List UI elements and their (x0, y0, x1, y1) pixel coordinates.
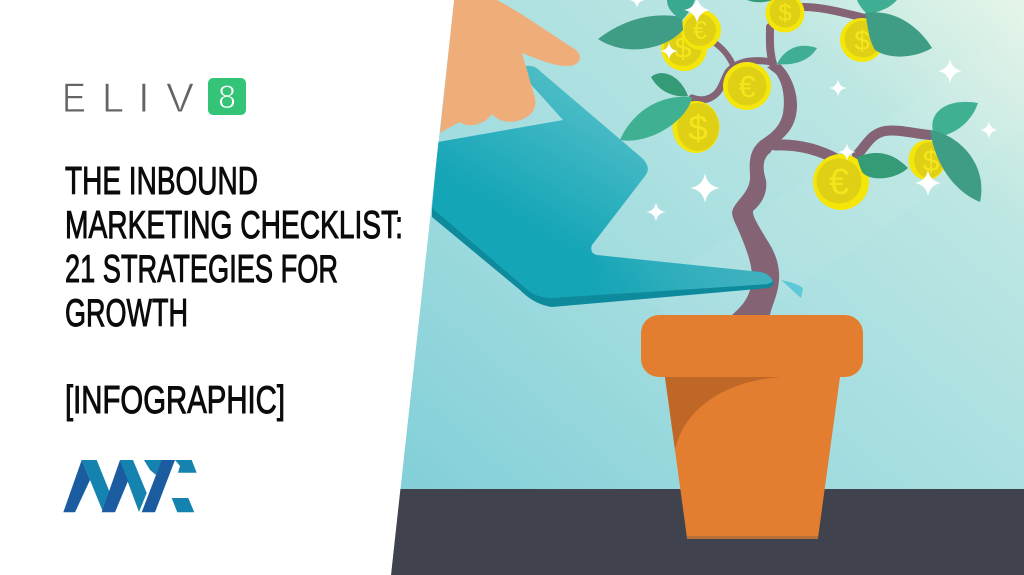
spout highlight (585, 255, 772, 296)
coins (661, 0, 946, 210)
watering can (432, 66, 774, 307)
logo: ELIV8 (62, 74, 246, 121)
coin: lower euro (813, 154, 869, 210)
coin: lower euro: € (829, 161, 849, 202)
logo wordmark: E (62, 74, 86, 121)
coin: top dollar: $ (778, 0, 792, 27)
logo wordmark: V (166, 74, 194, 121)
logo badge (208, 78, 246, 115)
logo wordmark (62, 74, 194, 121)
logo wordmark: I (138, 74, 150, 121)
water drop (781, 280, 803, 298)
table (391, 489, 1024, 575)
coin: right dollar: $ (923, 145, 940, 178)
coin: top left euro: € (693, 17, 707, 45)
hand (440, 0, 580, 133)
pot bottom edge (687, 536, 818, 539)
flower pot (641, 315, 863, 539)
light ray (640, 20, 1024, 340)
white title panel (0, 0, 454, 575)
title: THE INBOUND (65, 160, 258, 203)
coin: top right dollar (840, 18, 884, 62)
sparkles (629, 0, 998, 222)
coin: central euro (723, 62, 771, 110)
branches (692, 7, 930, 160)
pot body (665, 377, 840, 538)
tree (692, 7, 930, 315)
pot rim (641, 315, 863, 377)
can underside (432, 206, 774, 307)
title: 21 STRATEGIES FOR (65, 248, 338, 291)
coin: top left euro (681, 10, 721, 50)
pot shadow (665, 377, 782, 450)
coin: top left dollar: $ (675, 32, 692, 65)
can body (432, 66, 772, 298)
coin: central euro: € (738, 69, 756, 104)
coin: top dollar (766, 0, 804, 32)
coin: left dollar: $ (688, 109, 708, 148)
logo: MTC (63, 460, 197, 512)
logo badge: 8 (218, 79, 236, 115)
logo wordmark: L (102, 74, 124, 121)
coin: right dollar (908, 140, 946, 180)
coin: left dollar (672, 101, 720, 153)
leaves (598, 0, 981, 202)
coin: top right dollar: $ (854, 25, 870, 56)
title: GROWTH (65, 292, 188, 335)
coin: top left dollar (661, 25, 707, 71)
title: MARKETING CHECKLIST: (65, 204, 403, 247)
trunk (732, 64, 797, 315)
title (65, 160, 403, 335)
background scene (391, 0, 1024, 575)
subtitle: [INFOGRAPHIC] (65, 379, 285, 422)
